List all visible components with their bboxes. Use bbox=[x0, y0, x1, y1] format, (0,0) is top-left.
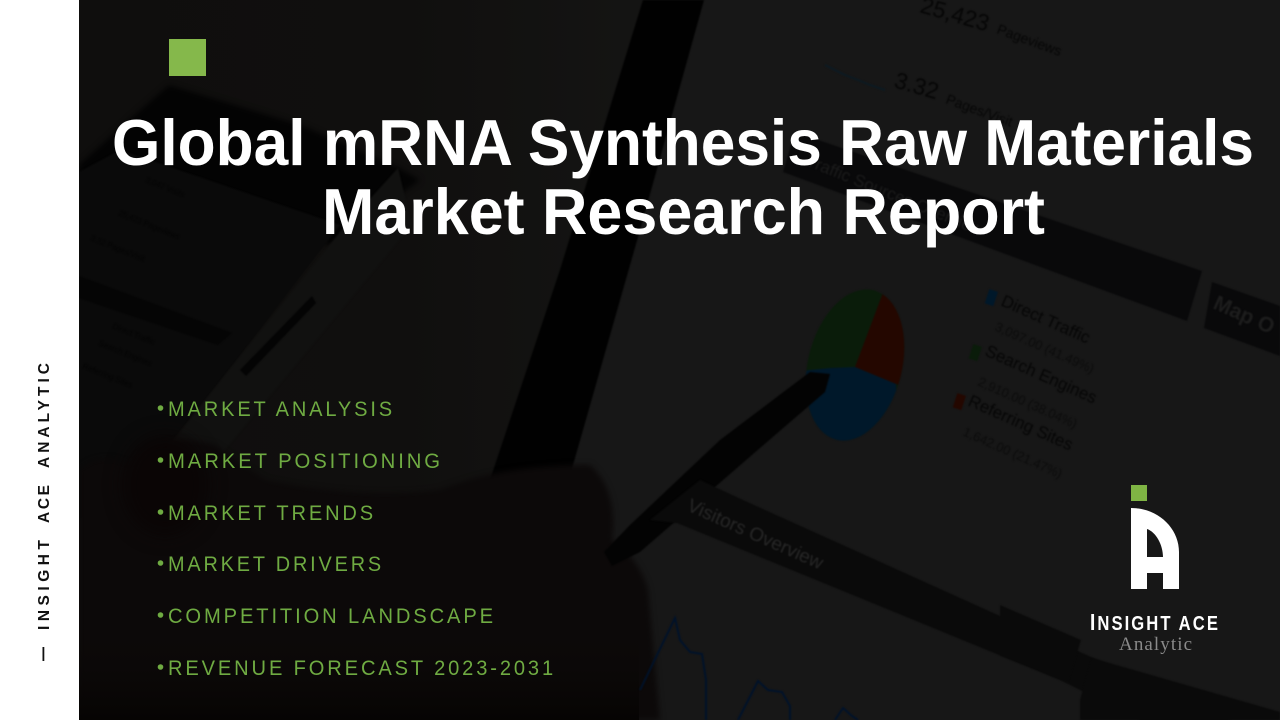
visitors line chart bbox=[640, 618, 858, 720]
tablet screen header band bbox=[79, 276, 232, 345]
logo subtitle: Analytic bbox=[1119, 634, 1192, 655]
top stats text: 3.32 bbox=[892, 67, 942, 104]
logo wordmark: INSIGHT ACE bbox=[1090, 609, 1220, 635]
pie legend: Search Engines bbox=[982, 341, 1100, 407]
pie legend: Referring Sites bbox=[965, 391, 1076, 454]
bullet list: report contents: MARKET ANALYSIS bbox=[168, 398, 395, 421]
vertical brand label: INSIGHT bbox=[36, 539, 53, 630]
pen bbox=[604, 372, 830, 566]
pie legend: 3,097.00 (41.49%) bbox=[993, 319, 1097, 376]
pie legend bbox=[953, 289, 1100, 481]
tablet mini labels: 25,423 Pageviews bbox=[117, 209, 181, 241]
traffic sources label: Traffic Sources Overview bbox=[804, 151, 986, 240]
black tablet top shadow bbox=[79, 85, 420, 245]
tablet mini labels: 3,047 Visits bbox=[144, 176, 186, 199]
pie legend: 1,642.00 (21.47%) bbox=[961, 424, 1065, 481]
dark shadow beneath the tablet corner bbox=[123, 435, 207, 535]
vertical brand label bbox=[36, 363, 53, 630]
tablet screen bbox=[79, 150, 340, 520]
title bbox=[112, 106, 1254, 248]
tablet mini labels: Search Engines bbox=[97, 339, 153, 368]
pie legend: 2,910.00 (38.04%) bbox=[976, 374, 1080, 431]
traffic sources band bbox=[783, 132, 1202, 321]
top stats text: Pages/Visit bbox=[944, 91, 1015, 130]
lower right dark block bbox=[1000, 605, 1081, 682]
left white sidebar bbox=[0, 0, 79, 720]
sidebar dash bbox=[42, 647, 44, 661]
tablet slot bbox=[240, 296, 316, 376]
contact block bbox=[1080, 658, 1280, 720]
tablet mini labels: Referring Sites bbox=[81, 362, 134, 390]
tablet mini labels: Direct Traffic bbox=[111, 322, 156, 347]
bullet list: report contents: MARKET DRIVERS bbox=[168, 553, 384, 576]
pie legend: Direct Traffic bbox=[998, 291, 1093, 348]
tablet mini labels: 3.32 Pages/Visit bbox=[89, 234, 147, 264]
title: Market Research Report bbox=[322, 175, 1045, 248]
pie chart bbox=[806, 290, 904, 441]
black tablet edge stripe bbox=[490, 0, 704, 500]
title: Global mRNA Synthesis Raw Materials bbox=[112, 106, 1254, 179]
top stats text: Pageviews bbox=[995, 21, 1064, 59]
hand bbox=[79, 440, 660, 720]
bullet list: report contents: REVENUE FORECAST 2023-2031 bbox=[168, 657, 556, 680]
accent green square bbox=[169, 39, 206, 76]
visitors overview label: Visitors Overview bbox=[684, 495, 827, 574]
map overlay label: Map O bbox=[1210, 292, 1278, 339]
vertical brand label: ACE bbox=[36, 485, 53, 523]
tablet frame bbox=[135, 168, 412, 510]
dark top-left backdrop bbox=[79, 0, 670, 720]
top stats text bbox=[892, 0, 1064, 130]
sparkline bbox=[825, 65, 885, 90]
bullet list: report contents: MARKET TRENDS bbox=[168, 502, 376, 525]
bullet list: report contents bbox=[158, 398, 556, 680]
logo green square bbox=[1131, 485, 1147, 501]
bullet list: report contents: COMPETITION LANDSCAPE bbox=[168, 605, 496, 628]
vertical brand label: ANALYTIC bbox=[36, 363, 53, 468]
bullet list: report contents: MARKET POSITIONING bbox=[168, 450, 443, 473]
tablet mini labels bbox=[81, 176, 186, 390]
logo: Insight Ace Analytic bbox=[1090, 485, 1220, 655]
map overlay band bbox=[1204, 282, 1280, 356]
logo A mark bbox=[1131, 508, 1179, 589]
lower hand shadow bbox=[79, 620, 639, 720]
visitors overview band bbox=[650, 480, 1232, 720]
